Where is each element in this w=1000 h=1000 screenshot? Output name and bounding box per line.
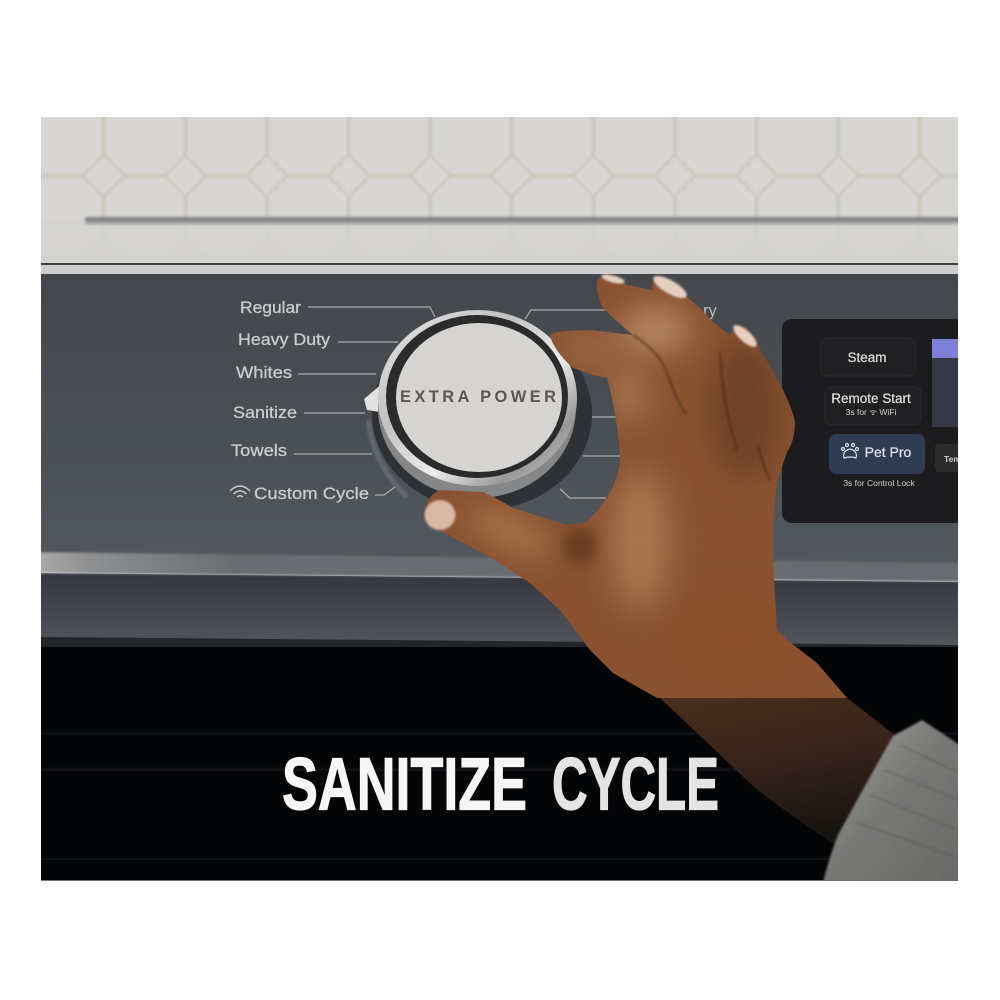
hand [420, 270, 860, 700]
countertop [30, 217, 970, 264]
finger creases [633, 335, 770, 480]
control lock caption: 3s for Control Lock [843, 478, 915, 488]
cycle labels left: Custom Cycle [254, 485, 369, 503]
knob chrome ring [378, 310, 577, 486]
black door [41, 637, 958, 881]
temp button: Tem [944, 454, 961, 464]
hand and arm [420, 270, 975, 895]
cycle labels left: Regular [240, 299, 302, 317]
display panel [782, 319, 975, 523]
sleeve ribs [856, 744, 956, 844]
hand base colour [420, 270, 860, 700]
photo panel [20, 110, 980, 895]
washer top edge [41, 263, 958, 274]
pet pro button: Pet Pro [865, 444, 912, 460]
icon: wifi [230, 486, 250, 497]
knob text: EXTRA POWER [400, 388, 556, 406]
cycle labels left: Sanitize [233, 404, 297, 422]
partly hidden label: ry [703, 302, 717, 320]
title word one: SANITIZE [282, 742, 527, 826]
tiled wall [41, 117, 958, 219]
forearm [660, 698, 895, 845]
temp button [935, 444, 958, 472]
pet pro button [829, 434, 925, 474]
knob base highlight [368, 420, 407, 497]
steam button [821, 338, 915, 376]
cycle labels left [231, 299, 369, 503]
screen [932, 339, 958, 427]
cycle labels left: Towels [231, 442, 287, 460]
knob shadow base [372, 365, 592, 506]
remote start button: Remote Start [831, 391, 911, 406]
control panel [41, 274, 958, 566]
knob assembly [364, 310, 592, 510]
title word two: CYCLE [552, 742, 719, 826]
remote start button: 3s for ᯤ WiFi [846, 407, 896, 417]
knob side [378, 402, 576, 497]
title [282, 742, 719, 826]
steam button: Steam [847, 350, 887, 365]
knob black ring [386, 315, 568, 478]
knob pointer [364, 386, 379, 412]
hand lighting [463, 306, 805, 685]
finger nails [424, 272, 760, 530]
cycle leader lines [294, 307, 622, 498]
infographic [41, 117, 958, 881]
panel lower section [41, 573, 958, 646]
cycle labels left: Whites [236, 364, 292, 382]
panel highlight bevel [20, 552, 980, 582]
thumb web shadow [563, 528, 597, 564]
sleeve [822, 719, 958, 881]
cycle labels left: Heavy Duty [238, 331, 331, 349]
icon: paw [842, 444, 858, 458]
remote start button [825, 387, 921, 425]
knob face [396, 323, 562, 472]
